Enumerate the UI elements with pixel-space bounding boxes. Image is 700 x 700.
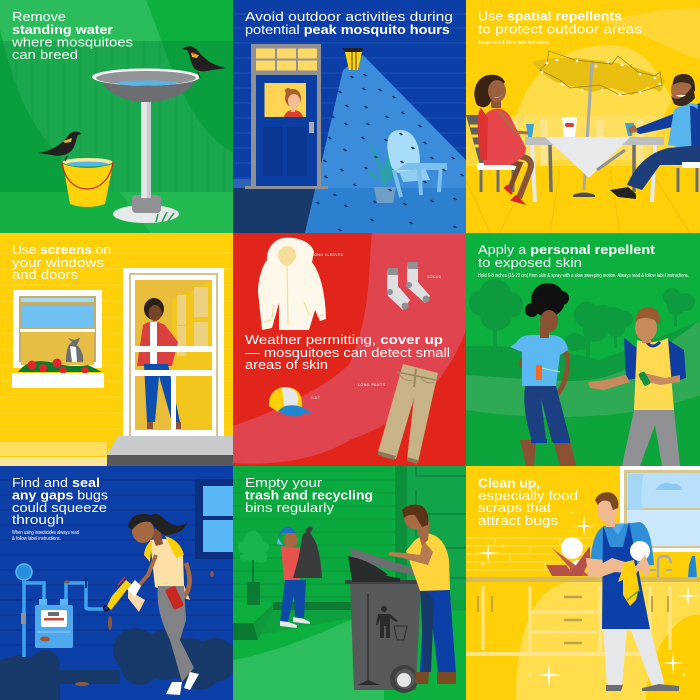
icon: socks [387,262,430,310]
icon: garbage bag in bin [348,556,388,580]
heading: seal gaps: any gaps bugs [12,488,109,502]
heading: peak mosquito hours [245,12,452,36]
heading: spatial repellents: Use spatial repellents [478,8,622,24]
icon: gas meter and pipes [16,564,108,657]
heading: peak mosquito hours: Avoid outdoor activities during [245,9,453,24]
icon: faucet and soap [650,556,697,577]
heading: remove standing water: can breed [12,47,78,62]
heading: personal repellent [478,242,689,279]
heading: spatial repellents: to protect outdoor areas [478,22,643,36]
icon: bearded man in blue shirt [610,74,700,199]
icon: woman with caulk gun [107,514,199,695]
heading: cover up: Weather permitting, cover up [245,332,443,347]
heading: clean up: scraps that [478,500,551,515]
icon: wheeled trash bin [345,548,425,693]
heading: seal gaps: & follow label instructions. [12,536,61,542]
heading: cover up [245,334,450,369]
heading: cover up: areas of skin [245,357,328,372]
heading: trash bins: Empty your [245,475,323,490]
light beam [305,55,466,233]
panel: cover up [233,233,466,466]
label: socks: SOCKS [427,275,442,279]
icon: porch lamp [343,48,363,70]
heading: cover up: — mosquitoes can detect small [245,345,450,360]
icon: door step [107,436,233,466]
heading: remove standing water [12,12,132,59]
icon: man lifting lid [388,505,456,684]
ground highlight [233,604,384,700]
label: hat: HAT [311,396,321,400]
icon: boy carrying garbage bag [277,526,322,628]
icon: woman in red dress on chair [466,75,531,203]
heading: clean up [478,476,578,528]
icon: dark bushes [0,628,237,700]
icon: dish rack [546,537,590,576]
mosquitoes swarm [316,74,464,231]
icon: outdoor table [525,117,664,202]
counter and cabinets [466,577,700,582]
heading: personal repellent: Apply a personal repellent [478,242,656,257]
panel: use screens [0,233,233,466]
icon: man washing dishes [586,492,679,691]
heading: use screens: your windows [12,255,105,270]
icon: bugs [64,571,214,686]
icon: people-with-bin symbol [376,606,407,640]
label: long sleeves: LONG SLEEVES [312,253,344,257]
label: long pants: LONG PANTS [358,383,386,387]
panel: seal gaps [0,466,237,700]
panel: trash bins [233,466,466,700]
heading: seal gaps [12,475,109,542]
icon: potted plant [368,142,396,203]
heading: remove standing water: standing water [12,22,113,37]
heading: use screens [12,245,110,279]
heading: remove standing water: where mosquitoes [11,34,134,50]
heading: clean up: attract bugs [478,513,559,528]
heading: trash bins: bins regularly [245,500,335,515]
icon: background trees [469,279,695,360]
icon: window with cat and flower box [12,290,104,388]
heading: peak mosquito hours: potential peak mosquito hours [245,22,450,37]
panel: personal repellent [466,233,700,466]
heading: seal gaps: When using insecticides always read [12,530,79,536]
icon: window over sink [620,466,700,552]
heading: seal gaps: through [12,512,64,527]
heading: trash bins: trash and recycling [245,488,373,502]
icon: long pants [378,364,438,464]
panel: clean up [466,466,700,700]
heading: spatial repellents [478,8,643,46]
panel: avoid peak mosquito hours [233,0,466,233]
icon: bird bath [92,68,200,223]
icon: blackbird on bucket [38,132,82,161]
icon: blackbird on bath [182,46,227,78]
icon: baseball cap [269,387,312,416]
icon: sparkles [477,510,699,687]
icon: potted tree [238,531,269,605]
panel: remove standing water [0,0,233,233]
icon: white jacket [258,238,326,330]
panel: spatial repellents [466,0,700,233]
icon: patio umbrella with string lights [532,51,665,197]
icon: man spraying repellent [588,307,686,466]
heading: clean up: especially food [478,488,578,503]
heading: seal gaps: could squeeze [12,500,107,515]
heading: use screens: and doors [12,267,79,282]
icon: bucket of water [62,158,113,207]
heading: trash bins [245,475,373,515]
icon: front door with woman [245,44,328,189]
heading: seal gaps: Find and seal [12,475,100,490]
icon: window [195,479,233,559]
icon: screen door with woman [123,268,224,436]
icon: woman spraying repellent [510,283,576,466]
heading: use screens: Use screens on [12,242,111,257]
heading: clean up: Clean up, [478,476,540,490]
heading: personal repellent: to exposed skin [478,255,582,270]
heading: spatial repellents: Always read & follow label instructions. [478,40,550,46]
heading: remove standing water: Remove [12,9,66,24]
icon: lawn chair [387,130,447,197]
